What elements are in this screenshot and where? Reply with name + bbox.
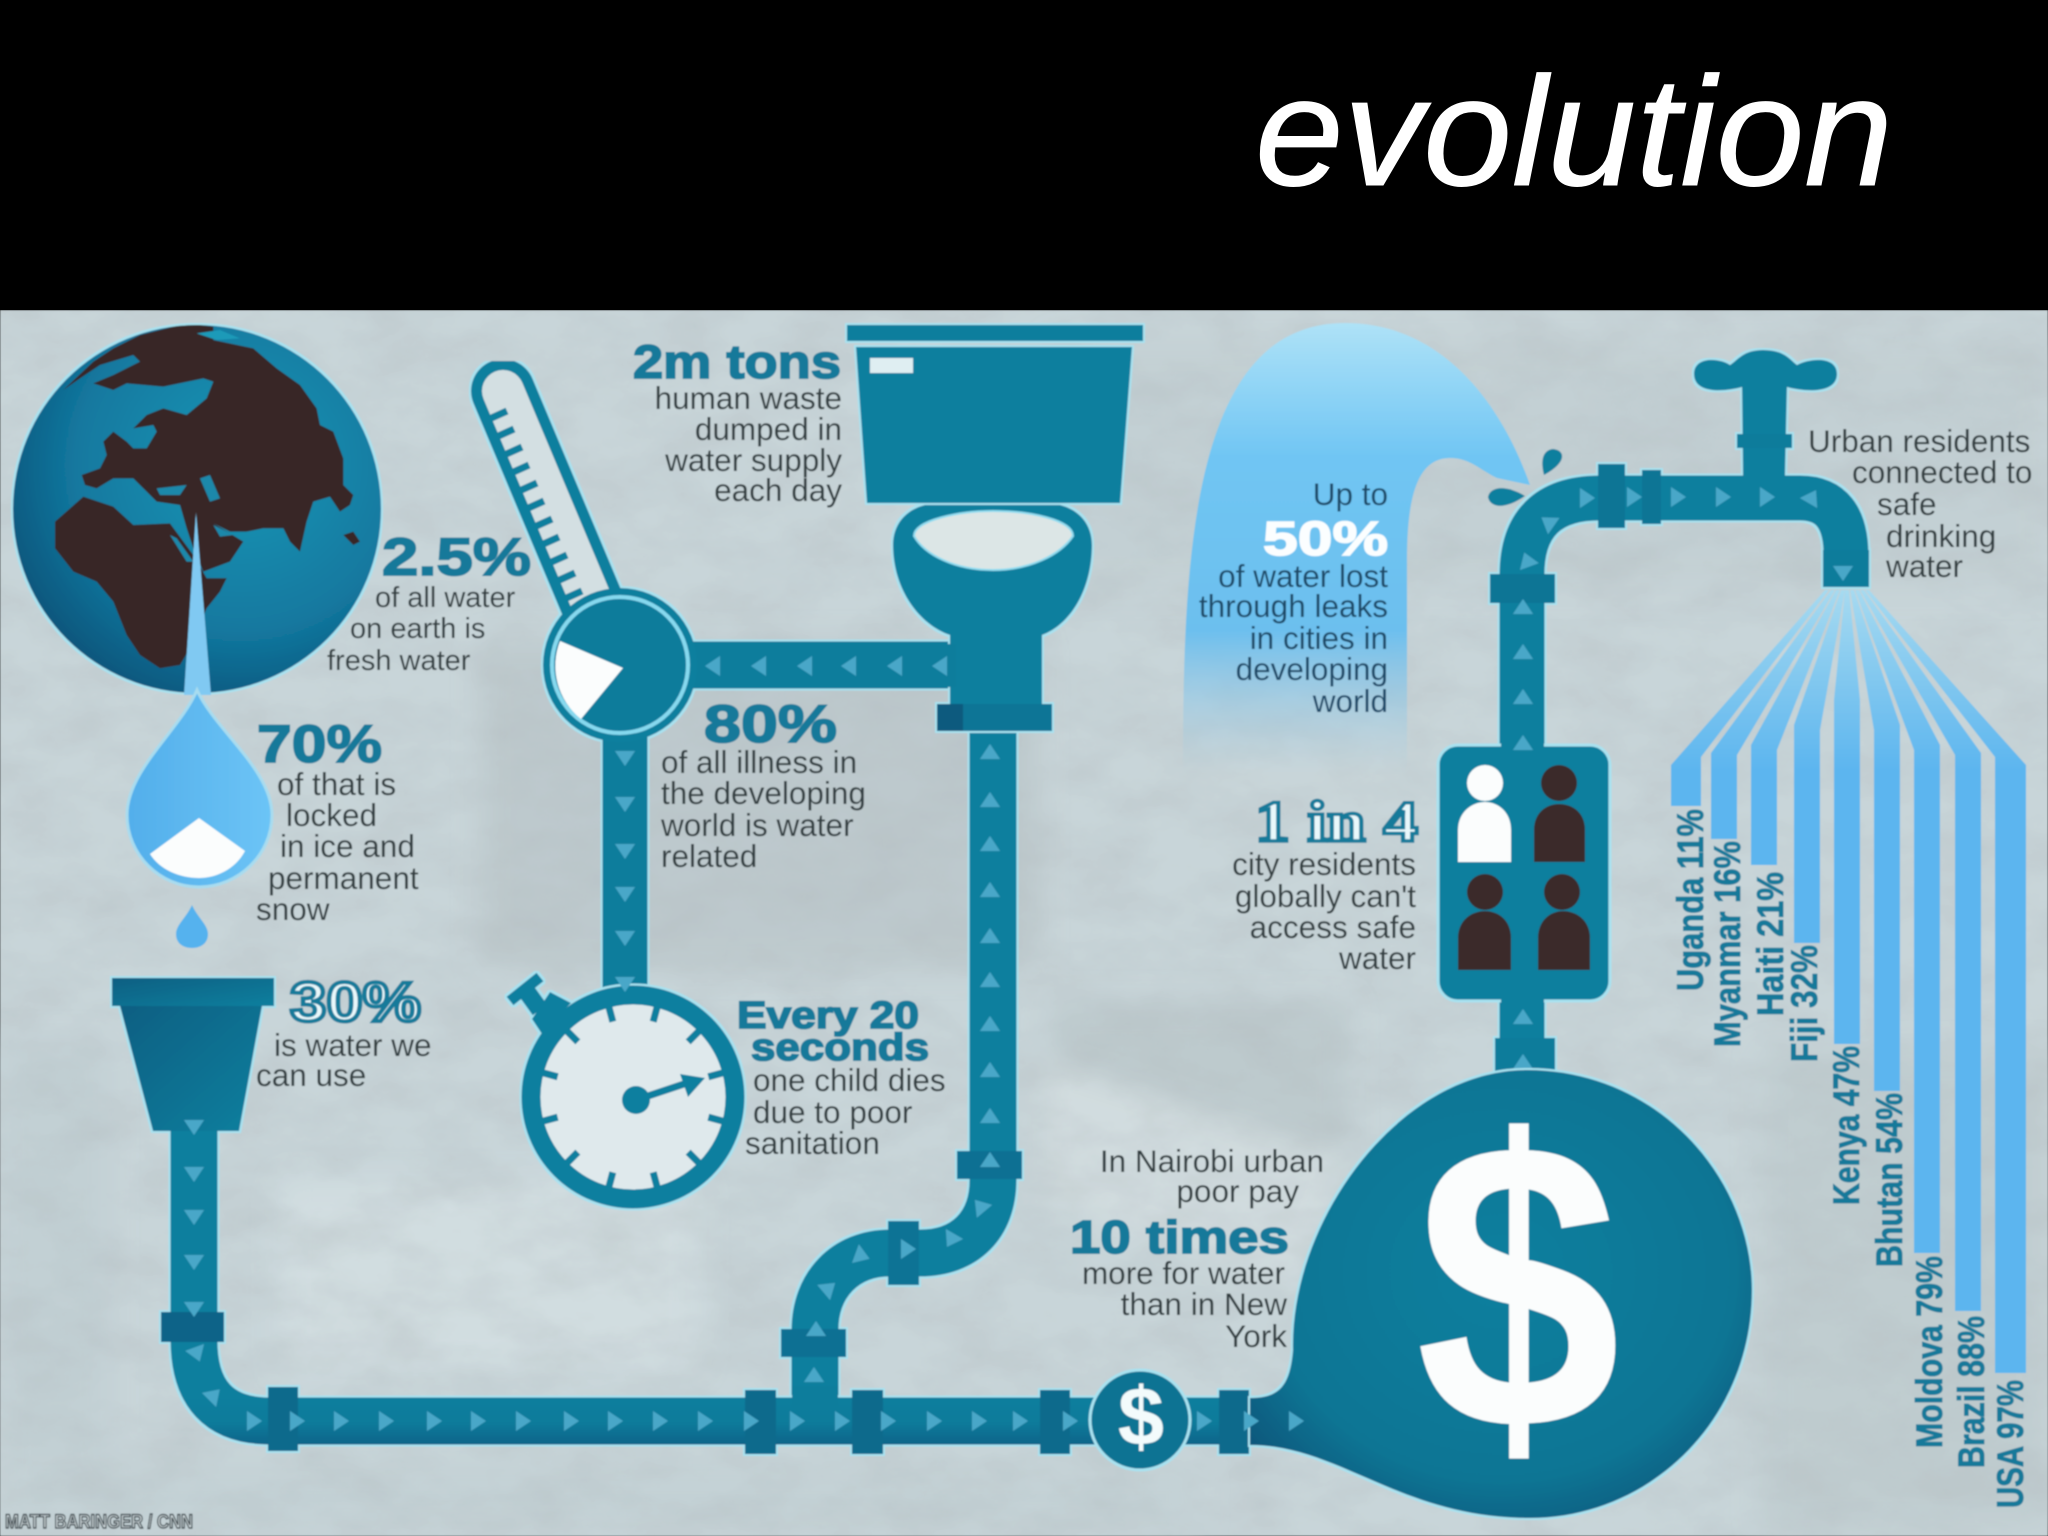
text: human waste: water supply [664, 442, 842, 478]
text: city residents: globally can't [1235, 878, 1416, 914]
text: water lost: of water lost [1218, 558, 1388, 594]
bar labels: USA 97% [1990, 1380, 2031, 1508]
text: urban residents: connected to [1852, 454, 2032, 490]
icon: thermometer [487, 391, 960, 990]
text: locked in ice: in ice and [280, 828, 415, 864]
text: illness [660, 744, 866, 874]
text: illness: the developing [661, 775, 866, 811]
icon: person with access [1458, 765, 1511, 862]
text: fresh water: of all water [375, 582, 516, 614]
text: child deaths: due to poor [753, 1094, 912, 1130]
text: usable water: can use [256, 1057, 366, 1093]
text: illness: related [661, 838, 757, 874]
icon: toilet seat [914, 511, 1073, 570]
text: city residents: access safe [1250, 909, 1416, 945]
stat: every 20 seconds: Every 20 [737, 995, 919, 1037]
panel: leaks [1183, 323, 1562, 775]
neck junction patch [930, 644, 956, 687]
text: city residents [1232, 846, 1416, 976]
arrows: waste pipe flow [804, 656, 1000, 1382]
icon: falling water stream [184, 512, 211, 695]
stat: 1 in 4: 1 in 4 [1255, 789, 1418, 854]
bar labels: Myanmar 16% [1707, 841, 1748, 1047]
icon: leaking water arc [1183, 323, 1530, 775]
text: urban residents [1808, 423, 2032, 584]
icon: small water drop [176, 905, 208, 948]
text: Nairobi: poor pay [1176, 1173, 1299, 1209]
text: urban residents: drinking [1886, 518, 1996, 554]
panel: toilet and waste pipe [633, 325, 1143, 1410]
text: city residents: water [1338, 940, 1416, 976]
panel: thermometer and stopwatch [487, 391, 960, 1199]
text: locked in ice: snow [256, 891, 330, 927]
text: New York comparison: York [1225, 1318, 1287, 1354]
textured city background [0, 310, 2048, 1536]
panel: urban water supply [1070, 350, 2032, 1518]
bar labels [1670, 809, 2031, 1508]
icon: large dollar sign: $ [1415, 1057, 1621, 1515]
icon: toilet [847, 325, 1143, 731]
icon: funnel and main pipe [112, 978, 1270, 1454]
text: urban residents: Urban residents [1808, 423, 2030, 459]
text: child deaths: one child dies [753, 1062, 946, 1098]
pipe junction patch [792, 1386, 838, 1410]
text: usable water [256, 1027, 432, 1093]
infographic body [0, 310, 2048, 1536]
stat: 10 times: 10 times [1070, 1211, 1289, 1263]
icon: waste pipe [781, 725, 1022, 1395]
stat: 80%: 80% [704, 695, 837, 754]
panel: main pipe network [112, 978, 1270, 1470]
credit: MATT BARINGER / CNN [5, 1512, 193, 1533]
icon: dollar valve: $ [1118, 1370, 1164, 1463]
icon: dollar bulb [1250, 1070, 1752, 1518]
icon: big water drop [127, 690, 272, 887]
icon: people without access [1458, 765, 1590, 970]
text: New York comparison: than in New [1121, 1286, 1287, 1322]
text: urban residents: safe [1877, 486, 1937, 522]
box bottom junction [1501, 996, 1544, 1008]
text: water lost: through leaks [1199, 588, 1388, 624]
text: locked in ice: locked [286, 797, 377, 833]
text: New York comparison [1082, 1255, 1287, 1354]
bar labels: Uganda 11% [1670, 809, 1711, 991]
icon: cistern handle [870, 358, 913, 373]
stat: 30%: 30% [290, 970, 421, 1033]
bar labels: Fiji 32% [1784, 945, 1825, 1062]
bars [1671, 590, 2026, 1373]
icon: globe [13, 323, 381, 693]
icon: dollar valve [1090, 1370, 1190, 1470]
text: human waste: dumped in [695, 411, 842, 447]
icon: stopwatch [510, 977, 735, 1199]
icon: people box [1438, 738, 1610, 1008]
text: water lost: developing [1236, 651, 1388, 687]
text: water lost [1199, 558, 1388, 719]
arrows: supply flow [1513, 485, 1853, 1069]
stat: 70%: 70% [257, 715, 382, 774]
panel: globe and fresh water [13, 323, 531, 1093]
stat: 2m tons: 2m tons [633, 335, 841, 388]
text: New York comparison: more for water [1082, 1255, 1285, 1291]
text: fresh water [327, 582, 516, 677]
stat: every 20 seconds: seconds [751, 1027, 929, 1069]
text: locked in ice: of that is [277, 766, 396, 802]
text: fresh water: on earth is [350, 613, 485, 645]
chart: country water bars [1670, 590, 2031, 1508]
arrows: main pipe flow [184, 1120, 1078, 1431]
stat: every 20 seconds [737, 995, 929, 1069]
text: child deaths: sanitation [745, 1125, 880, 1161]
text: fresh water: fresh water [327, 645, 471, 677]
text: city residents: city residents [1232, 846, 1416, 882]
text: locked in ice [256, 766, 419, 927]
title: evolution [1255, 45, 1893, 218]
text: human waste [655, 380, 842, 508]
text: Nairobi: In Nairobi urban [1100, 1143, 1324, 1179]
arrows: thermometer pipes [615, 656, 902, 992]
stat: 2.5%: 2.5% [382, 528, 531, 587]
bar labels: Bhutan 54% [1869, 1093, 1910, 1267]
text: Nairobi [1100, 1143, 1324, 1209]
text: illness: of all illness in [661, 744, 857, 780]
text: child deaths [745, 1062, 946, 1161]
text: up to: Up to [1313, 476, 1388, 512]
bar labels: Kenya 47% [1826, 1046, 1867, 1205]
arrows: flow into bulb [1197, 1411, 1304, 1431]
text: human waste: human waste [655, 380, 842, 416]
bar labels: Brazil 88% [1951, 1316, 1992, 1468]
text: usable water: is water we [274, 1027, 432, 1063]
text: illness: world is water [660, 807, 854, 843]
bar labels: Haiti 21% [1750, 872, 1791, 1016]
black title band [0, 0, 2048, 310]
icon: supply pipe and faucet [1490, 350, 1869, 1075]
bar labels: Moldova 79% [1909, 1256, 1950, 1448]
box top junction [1501, 738, 1544, 750]
text: locked in ice: permanent [268, 860, 419, 896]
text: water lost: world [1312, 683, 1388, 719]
text: water lost: in cities in [1250, 620, 1388, 656]
stat: 50%: 50% [1263, 513, 1388, 566]
text: human waste: each day [714, 472, 842, 508]
icon: leak drops [1488, 449, 1562, 506]
text: urban residents: water [1885, 548, 1963, 584]
